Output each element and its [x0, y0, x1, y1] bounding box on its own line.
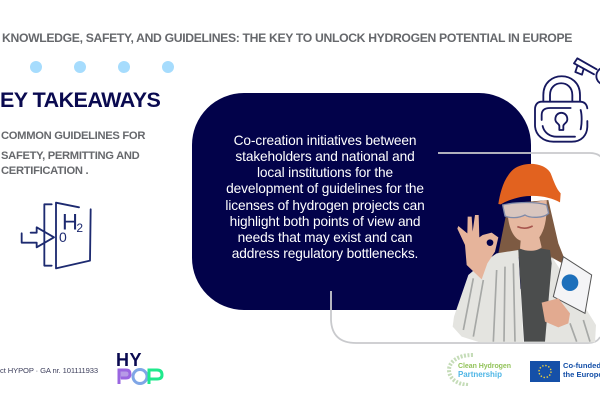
- takeaway text: CERTIFICATION .: [1, 165, 88, 177]
- face and neck: [507, 200, 547, 251]
- title: KNOWLEDGE, SAFETY, AND GUIDELINES: THE KEY TO UNLOCK HYDROGEN POTENTIAL IN EUROPE: [2, 31, 572, 45]
- panel paragraph: needs that may exist and can: [238, 230, 412, 245]
- coat stripes: [463, 263, 590, 342]
- logo: Clean Hydrogen Partnership: [447, 353, 511, 386]
- safety goggles: [503, 202, 549, 218]
- logo: EU co-funded: [530, 361, 600, 382]
- panel paragraph: local institutions for the: [257, 165, 393, 180]
- shirt: [518, 247, 552, 342]
- takeaway text: [1, 130, 146, 177]
- logo text: [458, 362, 511, 379]
- coat: [453, 250, 596, 342]
- EU text: [563, 361, 600, 378]
- panel paragraph: highlight both points of view and: [230, 214, 420, 229]
- logo word: POP: [118, 368, 164, 385]
- logo: HyPOP: [116, 350, 164, 385]
- takeaway text: SAFETY, PERMITTING AND: [1, 150, 139, 162]
- icon: hydrogen door with arrow: 0: [59, 229, 67, 245]
- clipboard: [553, 257, 592, 313]
- takeaway text: COMMON GUIDELINES FOR: [1, 130, 145, 142]
- illustration: engineer with hard hat: [452, 164, 596, 342]
- panel paragraph: stakeholders and national and: [235, 149, 415, 164]
- panel: navy text block: [192, 93, 531, 310]
- panel paragraph: Co-creation initiatives between: [234, 133, 416, 148]
- mouth: [517, 226, 533, 228]
- logo text: Clean Hydrogen: [458, 363, 511, 370]
- logo word: Hy: HY: [116, 350, 142, 370]
- panel paragraph: [225, 133, 425, 261]
- icon: hydrogen door with arrow: [20, 202, 92, 270]
- icon: hydrogen door with arrow: H: [62, 209, 78, 234]
- hair: [496, 200, 567, 266]
- EU flag: [530, 361, 560, 382]
- holding hand: [542, 298, 570, 327]
- icon: padlock and key: [534, 57, 600, 143]
- panel paragraph: development of guidelines for the: [226, 181, 424, 196]
- panel paragraph: licenses of hydrogen projects can: [225, 198, 425, 213]
- progress dots: [30, 61, 174, 73]
- panel paragraph: address regulatory bottlenecks.: [232, 246, 418, 261]
- heading: key takeaways: EY TAKEAWAYS: [0, 88, 160, 112]
- logo text: Partnership: [458, 370, 502, 379]
- footer: project note: ct HYPOP · GA nr. 101111933: [0, 366, 98, 375]
- logo arc: [447, 353, 473, 386]
- hand: [457, 215, 498, 279]
- hard hat: [498, 164, 561, 204]
- icon: hydrogen door with arrow: 2: [76, 221, 83, 235]
